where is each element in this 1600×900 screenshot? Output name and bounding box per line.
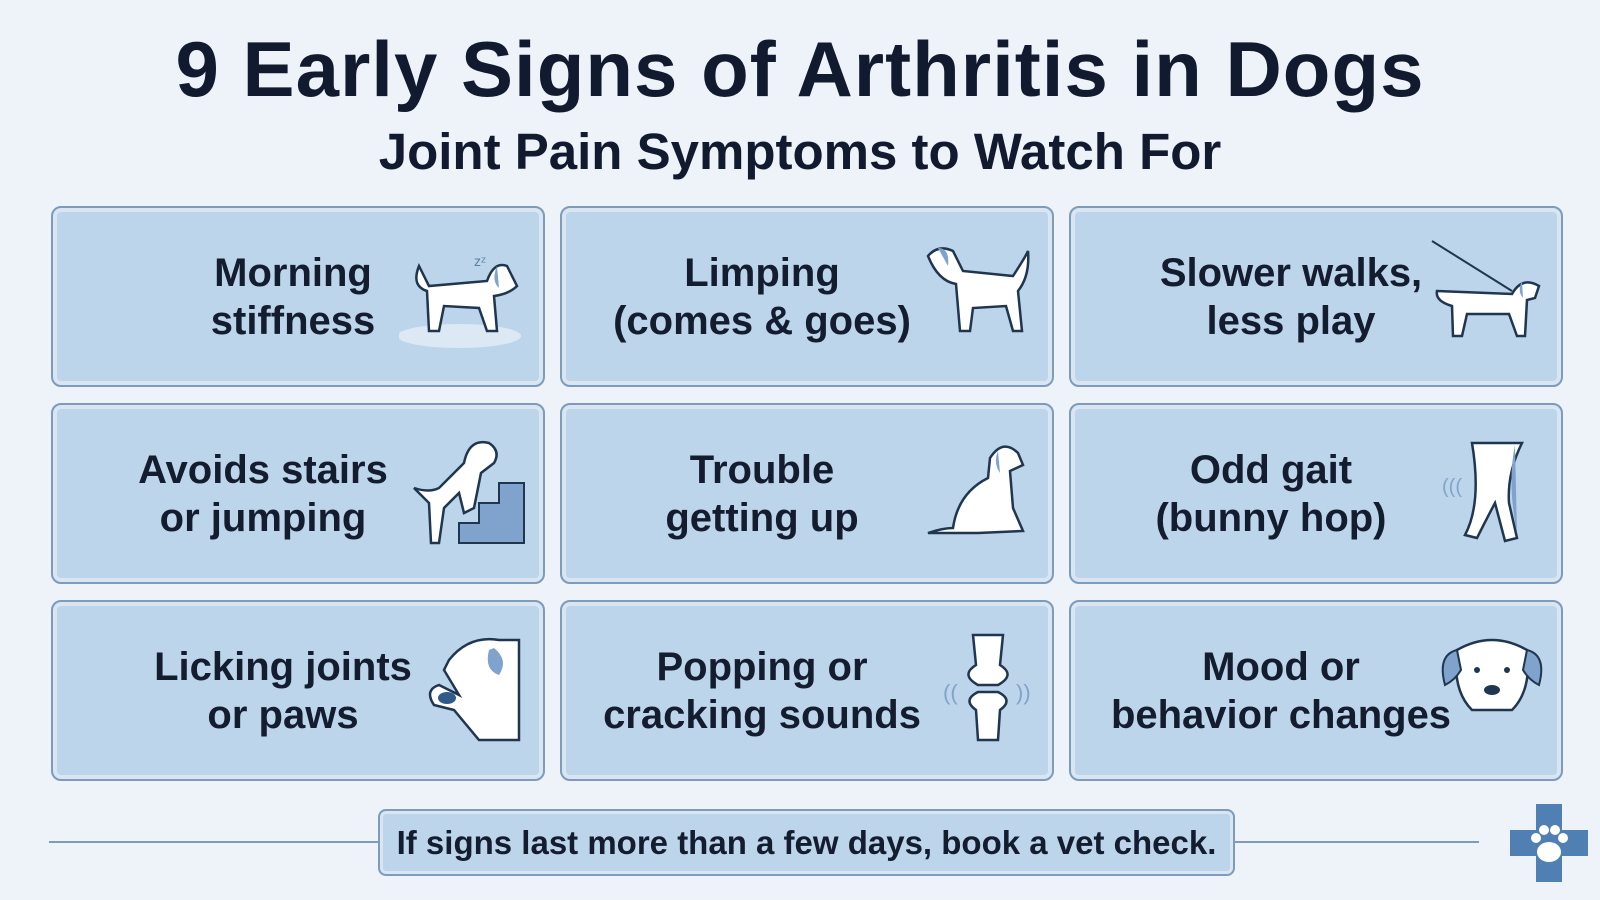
panel: morning stiffness: Morning: [214, 250, 372, 294]
panel: licking joints: [51, 600, 545, 781]
icon: sleepy dog: zᶻ: [474, 253, 486, 269]
panel: popping sounds: [560, 600, 1054, 781]
callout: footer note: If signs last more than a few days, book a vet check.: [397, 824, 1216, 861]
panel: licking joints: Licking joints: [154, 644, 412, 688]
panel: odd gait: [1069, 403, 1563, 584]
panel: limping: [560, 206, 1054, 387]
icon: hind legs: (((: [1442, 476, 1462, 498]
panel: morning stiffness: stiffness: [211, 298, 375, 342]
panel: morning stiffness: [51, 206, 545, 387]
panel: popping sounds: cracking sounds: [603, 692, 921, 736]
divider line: [49, 841, 1479, 843]
icon: knee joint: ((: [943, 680, 958, 705]
icon: grumpy dog face: [1442, 638, 1542, 712]
panel: slower walks: [1069, 206, 1563, 387]
icon: dog on leash: [1432, 240, 1540, 338]
icon: knee joint: [943, 634, 1031, 742]
panel: popping sounds: Popping or: [656, 644, 868, 688]
panel: avoids stairs: or jumping: [160, 496, 366, 540]
icon: sleepy dog: [399, 253, 521, 348]
icon: dog licking paw: [428, 638, 520, 742]
icon: limping dog: [926, 247, 1030, 332]
panel: avoids stairs: [51, 403, 545, 584]
icon: hind legs: [1442, 442, 1524, 542]
panel: trouble getting up: [560, 403, 1054, 584]
panel: odd gait: (bunny hop): [1155, 496, 1387, 540]
panel: limping: (comes & goes): [613, 298, 911, 342]
callout: footer note: [378, 809, 1235, 876]
icon: vet cross paw: [1510, 804, 1588, 882]
panel: odd gait: Odd gait: [1190, 448, 1352, 492]
panel: slower walks: less play: [1206, 298, 1376, 342]
panel: licking joints: or paws: [207, 692, 359, 736]
panel: mood changes: Mood or: [1202, 644, 1360, 688]
title: 9 Early Signs of Arthritis in Dogs: [176, 25, 1424, 113]
panel: limping: Limping: [684, 250, 840, 294]
panel: trouble getting up: getting up: [665, 496, 859, 540]
icon: dog on stairs: [413, 440, 525, 544]
icon: sitting dog: [928, 445, 1025, 534]
panel: slower walks: Slower walks,: [1160, 250, 1422, 294]
panel: mood changes: behavior changes: [1111, 692, 1451, 736]
panel: avoids stairs: Avoids stairs: [138, 448, 388, 492]
subtitle: Joint Pain Symptoms to Watch For: [379, 123, 1221, 180]
panel: mood changes: [1069, 600, 1563, 781]
icon: knee joint: )): [1016, 680, 1031, 705]
panel: trouble getting up: Trouble: [690, 448, 834, 492]
